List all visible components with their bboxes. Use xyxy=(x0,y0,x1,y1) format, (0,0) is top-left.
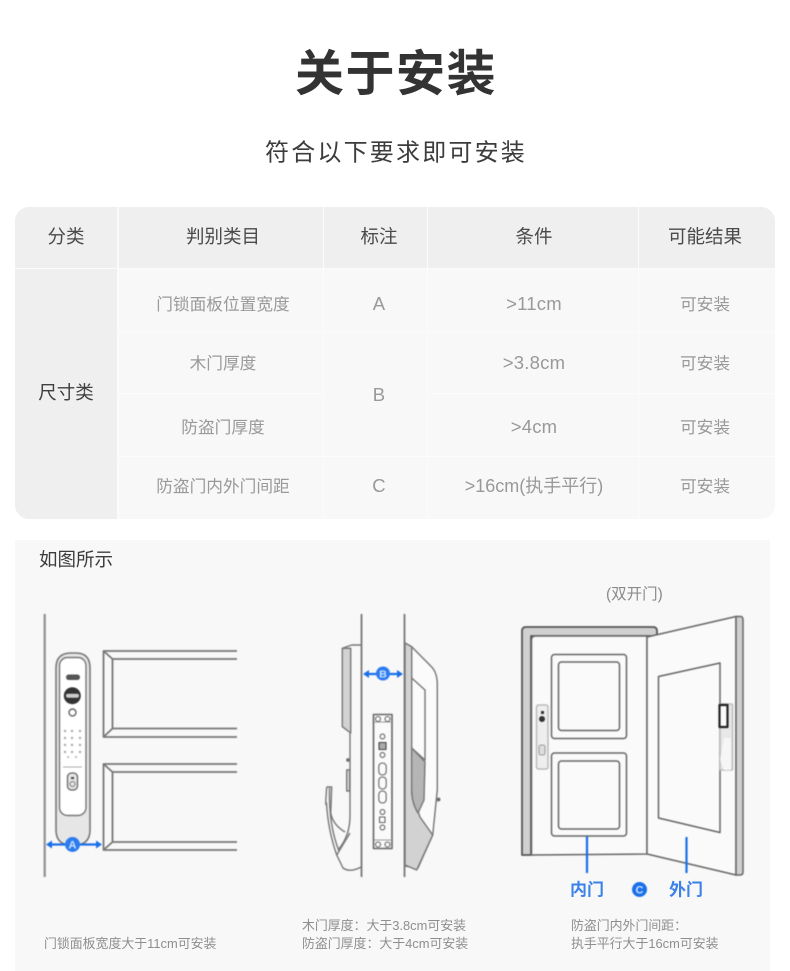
table header: 条件: 条件 xyxy=(515,226,553,247)
row 3 result: 可安装 xyxy=(680,418,730,437)
row 3 item: 防盗门厚度 xyxy=(181,418,265,437)
row 2 item: 木门厚度 xyxy=(190,354,256,373)
caption B xyxy=(302,918,468,951)
row 1 result: 可安装 xyxy=(680,295,730,314)
icon: mortise plate xyxy=(374,714,392,848)
icon: lock outer side xyxy=(405,643,440,870)
label: inner door: 内门 xyxy=(570,880,604,900)
icon: C badge xyxy=(632,882,647,897)
row 4 result: 可安装 xyxy=(680,477,730,496)
row 2 result: 可安装 xyxy=(680,354,730,373)
table: installation conditions xyxy=(15,207,775,519)
arrow A xyxy=(46,837,102,852)
door panel upper xyxy=(104,651,237,737)
row 1 condition: >11cm xyxy=(506,293,562,314)
subtitle: 符合以下要求即可安装 xyxy=(265,140,527,166)
row 2 condition: >3.8cm xyxy=(503,352,565,373)
icon: inner door xyxy=(532,636,647,855)
caption C: 执手平行大于16cm可安装 xyxy=(571,936,719,951)
arrow B: B xyxy=(379,668,387,680)
caption B: 木门厚度：大于3.8cm可安装 xyxy=(302,918,466,933)
icon: lock front xyxy=(56,653,90,845)
table header: 分类: 分类 xyxy=(47,226,85,247)
label: double door: (双开门) xyxy=(606,586,663,603)
row 4 item: 防盗门内外门间距 xyxy=(156,477,290,496)
row 1 label: A xyxy=(373,293,385,314)
row 1 item: 门锁面板位置宽度 xyxy=(156,295,290,314)
icon: outer door xyxy=(647,616,743,875)
title: 关于安装 xyxy=(295,48,497,102)
icon: C badge: C xyxy=(636,884,644,896)
caption A: 门锁面板宽度大于11cm可安装 xyxy=(44,936,216,951)
caption C: 防盗门内外门间距： xyxy=(571,918,687,933)
door edges side view xyxy=(362,614,404,877)
table header: 可能结果: 可能结果 xyxy=(668,226,742,247)
table header: 标注: 标注 xyxy=(360,226,398,247)
panel heading: 如图所示 xyxy=(39,549,113,570)
icon: lock inner side xyxy=(326,645,362,870)
arrow A: A xyxy=(69,840,77,852)
table header: 判别类目: 判别类目 xyxy=(186,226,260,247)
caption B: 防盗门厚度：大于4cm可安装 xyxy=(302,936,468,951)
door panel lower xyxy=(104,764,237,850)
wall line xyxy=(44,614,46,877)
category: 尺寸类: 尺寸类 xyxy=(38,382,94,403)
icon: door frame xyxy=(522,627,657,855)
callout lines xyxy=(587,836,686,873)
row 3 condition: >4cm xyxy=(511,416,557,437)
merged label B: B xyxy=(373,384,385,405)
row 4 condition: >16cm(执手平行) xyxy=(465,476,603,496)
category column background xyxy=(15,268,117,519)
header row background xyxy=(15,207,775,268)
row 4 label: C xyxy=(372,475,386,496)
panel: diagrams xyxy=(15,540,770,971)
label: outer door: 外门 xyxy=(669,880,703,900)
caption C xyxy=(571,918,719,951)
arrow B xyxy=(363,666,403,680)
